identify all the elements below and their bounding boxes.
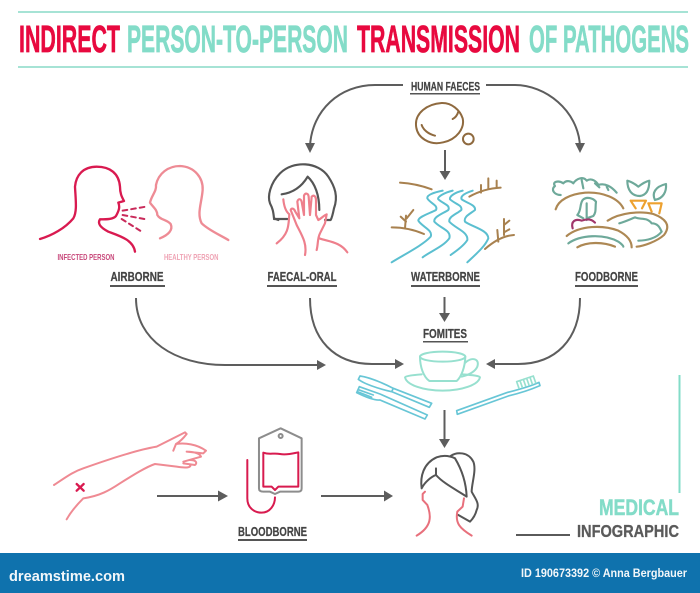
footer bar: ID 190673392 © Anna Bergbauer: [521, 568, 687, 580]
label: airborne: [110, 269, 165, 287]
footer bar: [0, 553, 700, 593]
arrow: foodborne to fomites: [486, 298, 580, 369]
label: bloodborne: BLOODBORNE: [238, 525, 307, 539]
icon: food: [553, 178, 667, 247]
icon: knife and fork: [357, 376, 432, 419]
hair: [269, 164, 336, 220]
banks: [400, 183, 432, 189]
footer bar: dreamstime.com: [9, 569, 125, 585]
title: [18, 11, 689, 68]
arrow: faeces to waterborne: [440, 150, 450, 180]
label: fomites: FOMITES: [423, 327, 467, 341]
icon: infected and healthy persons: [40, 166, 228, 252]
right mound: [608, 212, 667, 247]
arrow: faeces to faecal-oral: [305, 85, 403, 153]
human faeces label: [410, 80, 480, 94]
title: INDIRECT: [19, 19, 120, 61]
arrow: faeces to foodborne: [486, 85, 585, 153]
icon: woman head: [417, 453, 478, 536]
title: PERSON-TO-PERSON: [127, 19, 348, 61]
human faeces label: HUMAN FAECES: [411, 80, 480, 94]
droplets: [122, 207, 146, 232]
icon: person touching face: [269, 164, 347, 255]
icon: blood bag: [247, 428, 302, 513]
caption: infected person: INFECTED PERSON: [58, 252, 114, 262]
beet: [577, 198, 596, 220]
icon: river: [392, 178, 514, 262]
label: faecal-oral: FAECAL-ORAL: [268, 269, 337, 284]
sprouts and carrots: [627, 181, 649, 196]
icon: arm with puncture: [54, 432, 206, 519]
arrow: blood bag to person: [321, 490, 393, 502]
medical infographic tag: MEDICAL: [599, 495, 679, 520]
icon: faeces: [416, 103, 474, 144]
medical infographic tag: INFOGRAPHIC: [577, 521, 679, 541]
label: waterborne: [411, 269, 480, 287]
medical infographic tag: [516, 375, 680, 541]
hand and neck: [277, 199, 289, 243]
arrow: fomites to person: [439, 410, 450, 448]
icon: cup and saucer: [405, 352, 480, 391]
arrow: faecal-oral to fomites: [310, 298, 404, 369]
title: TRANSMISSION: [357, 19, 520, 61]
arrow: airborne to fomites: [136, 298, 326, 370]
arrow: waterborne to fomites: [439, 297, 450, 322]
infected person: [40, 167, 135, 252]
lettuce: [553, 178, 617, 195]
label: foodborne: [575, 269, 638, 287]
arrow: arm to blood bag: [157, 490, 228, 502]
healthy person: [150, 166, 228, 240]
label: foodborne: FOODBORNE: [575, 269, 638, 284]
label: bloodborne: [238, 525, 307, 541]
front mound: [567, 227, 632, 247]
icon: toothbrush: [457, 376, 540, 414]
label: waterborne: WATERBORNE: [411, 269, 480, 284]
caption: healthy person: HEALTHY PERSON: [164, 252, 218, 262]
label: faecal-oral: [267, 269, 337, 287]
label: airborne: AIRBORNE: [110, 269, 164, 284]
